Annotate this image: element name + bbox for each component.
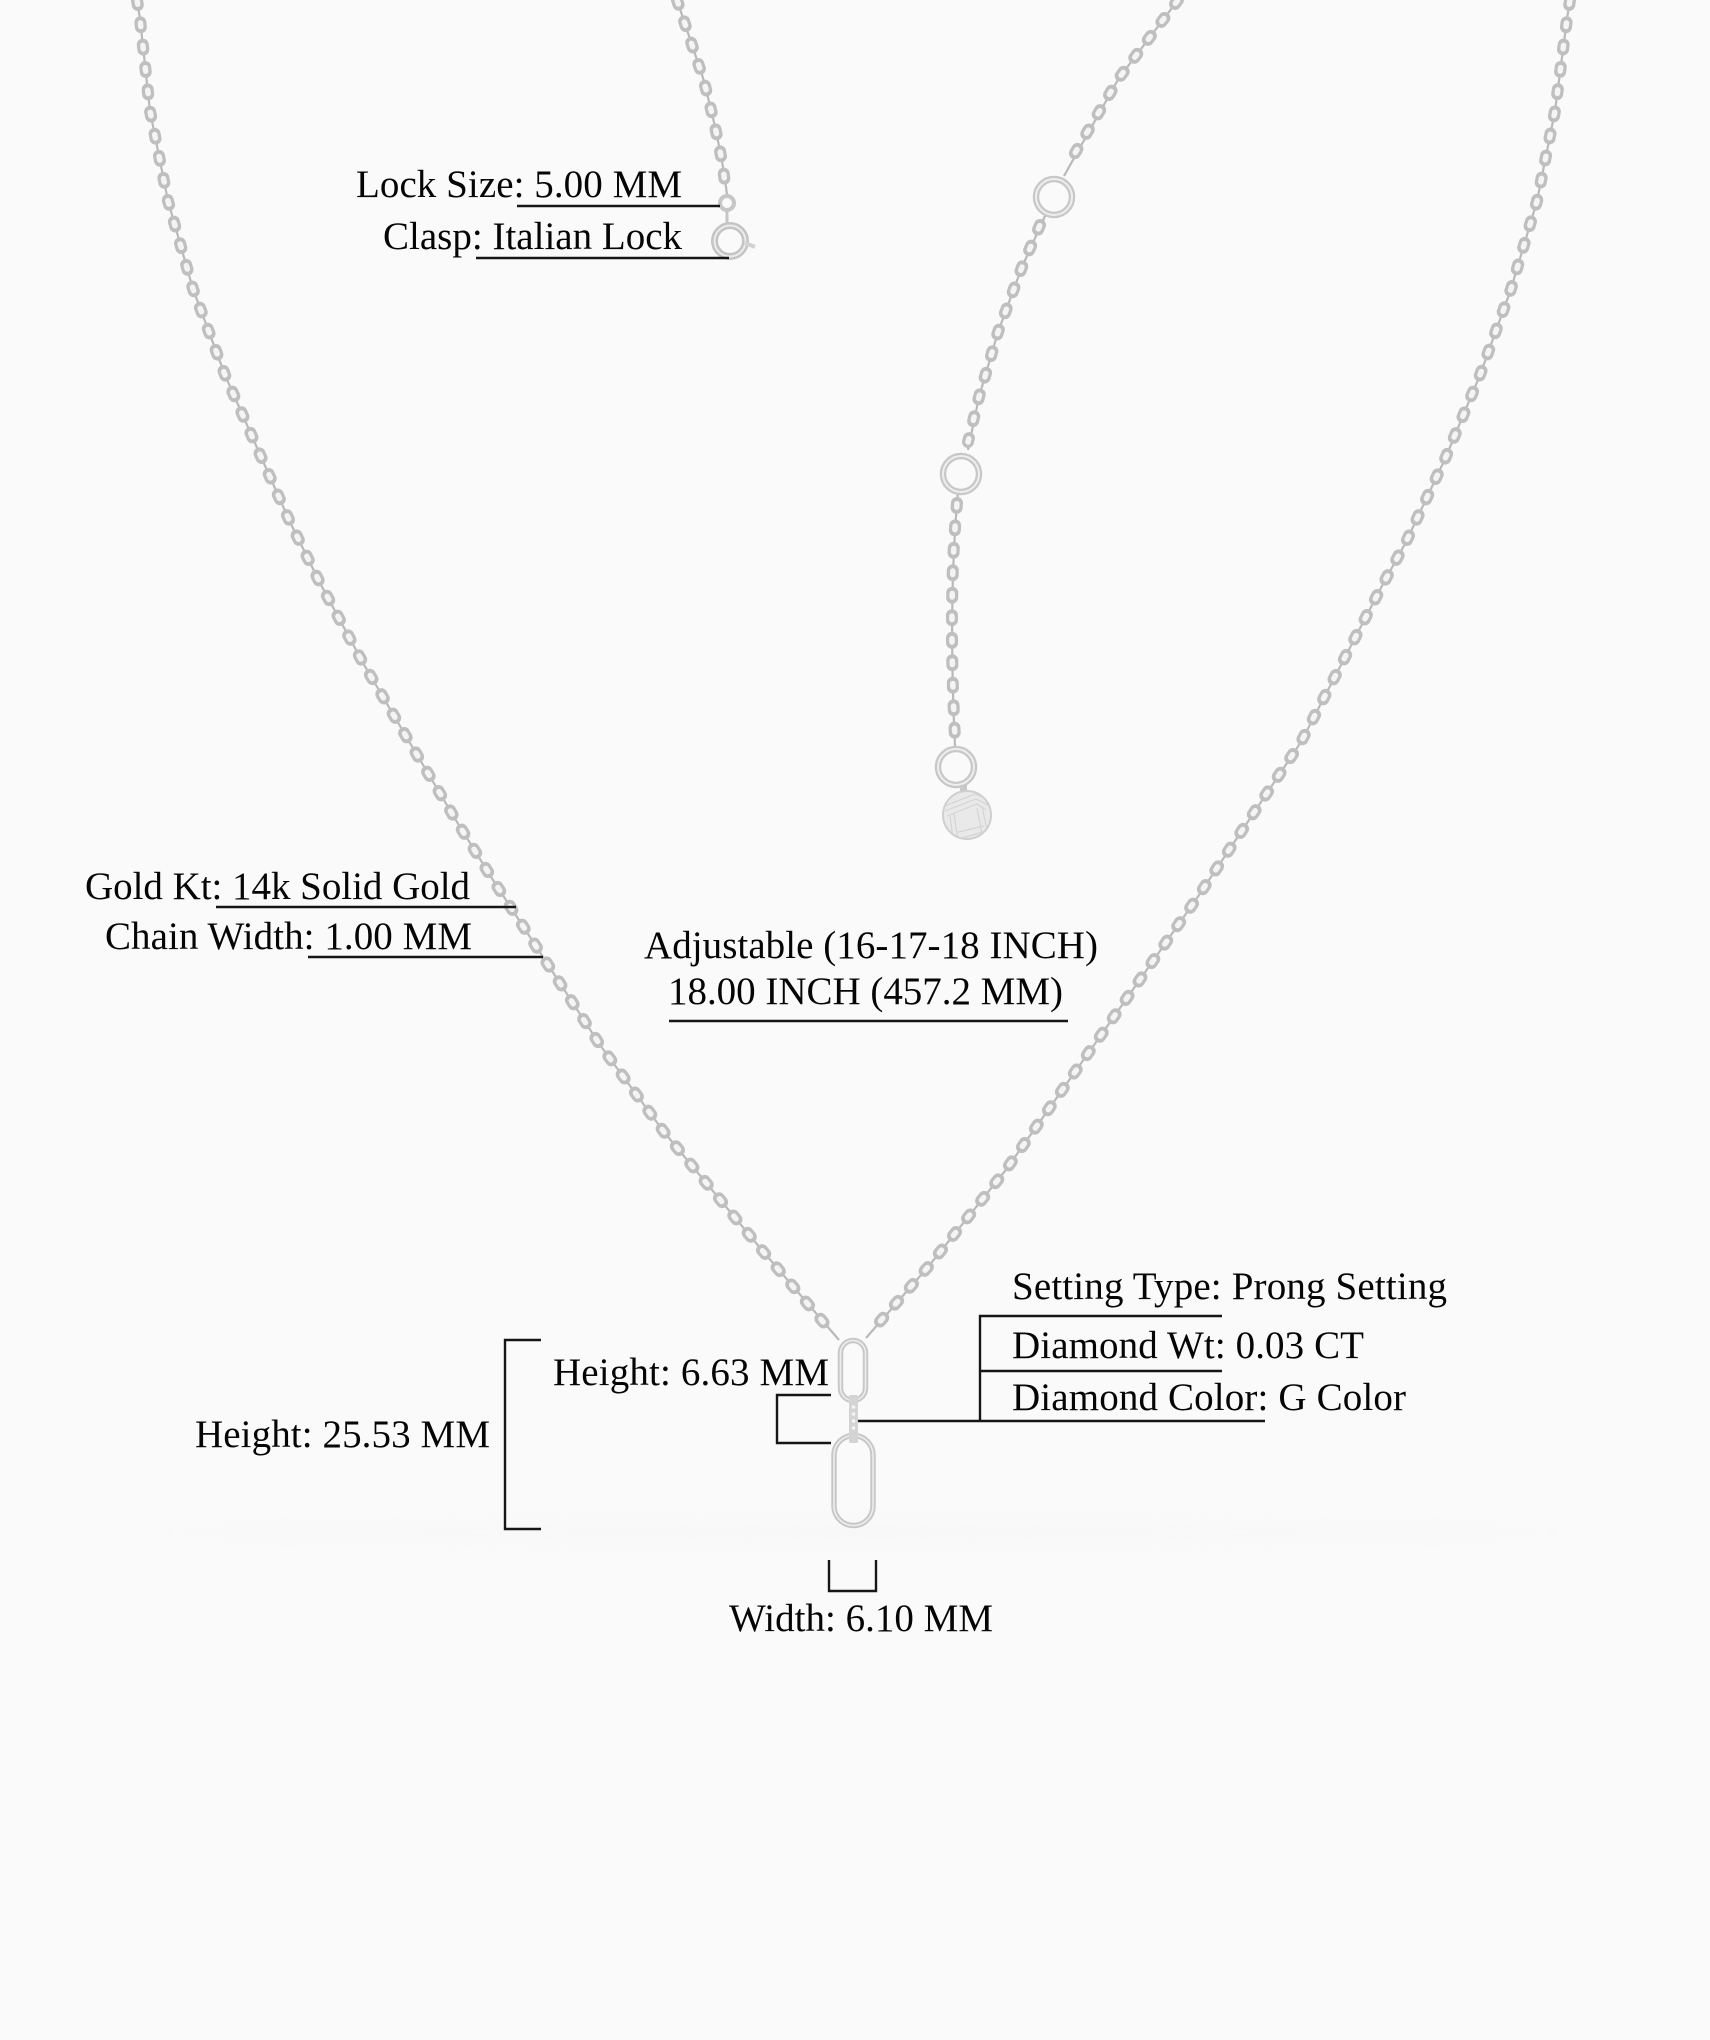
lower paperclip link bbox=[834, 1436, 873, 1526]
label: clasp: Clasp: Italian Lock bbox=[383, 215, 682, 258]
diamond bar bbox=[849, 1395, 858, 1443]
left chain strand bbox=[137, 0, 839, 1340]
label: lock size: Lock Size: 5.00 MM bbox=[356, 163, 682, 206]
label: diamond details bbox=[858, 1265, 1447, 1421]
label: total height bbox=[195, 1340, 541, 1529]
label: diamond details: Diamond Color: G Color bbox=[1012, 1376, 1406, 1419]
pendant bbox=[834, 1340, 873, 1526]
upper paperclip link bbox=[840, 1340, 866, 1400]
ground shadow bbox=[140, 1518, 1580, 1546]
label: total height: Height: 25.53 MM bbox=[195, 1413, 490, 1456]
label: upper link height bbox=[553, 1351, 831, 1443]
label: width bbox=[729, 1560, 993, 1640]
extender chain bbox=[952, 0, 1178, 746]
right chain strand bbox=[866, 0, 1570, 1338]
label: chain length: 18.00 INCH (457.2 MM) bbox=[668, 970, 1063, 1013]
necklace specification infographic bbox=[86, 0, 1576, 1632]
icon: extender rings bbox=[938, 179, 1072, 785]
label: gold karat: Gold Kt: 14k Solid Gold bbox=[85, 865, 470, 908]
label: diamond details: Diamond Wt: 0.03 CT bbox=[1012, 1324, 1364, 1367]
back chain strand to clasp bbox=[677, 0, 727, 195]
icon: engraved charm disc bbox=[943, 785, 991, 840]
icon: clasp jump ring and spring ring bbox=[714, 196, 755, 256]
label: upper link height: Height: 6.63 MM bbox=[553, 1351, 829, 1394]
label: chain length bbox=[644, 924, 1098, 1021]
label: chain width: Chain Width: 1.00 MM bbox=[105, 915, 472, 958]
label: chain length: Adjustable (16-17-18 INCH) bbox=[644, 924, 1098, 967]
label: diamond details: Setting Type: Prong Setting bbox=[1012, 1265, 1447, 1308]
label: width: Width: 6.10 MM bbox=[729, 1597, 993, 1640]
